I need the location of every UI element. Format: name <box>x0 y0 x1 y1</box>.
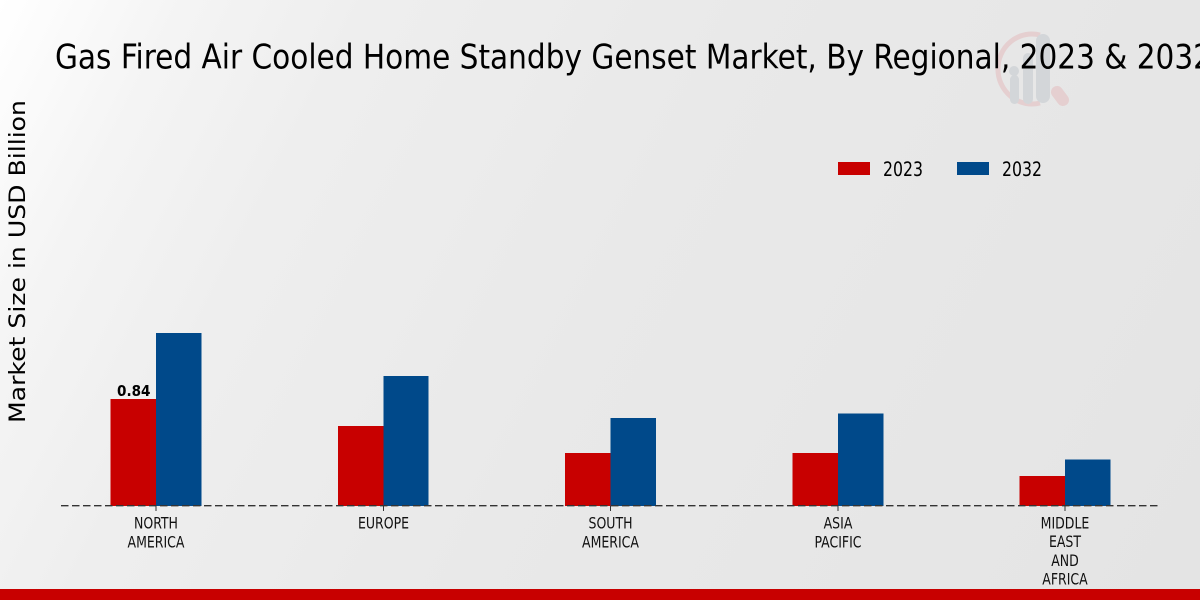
label: North America: AMERICA <box>128 532 185 552</box>
axis baseline <box>61 505 1160 507</box>
bars: North America <box>110 333 202 506</box>
data label: 0.84: 0.84 <box>117 382 151 400</box>
label: Asia Pacific: ASIA <box>824 513 853 533</box>
bars: South America <box>565 418 656 506</box>
bar chart <box>61 333 1160 511</box>
bars: Middle East and Africa <box>1020 460 1110 506</box>
label: Middle East and Africa: EAST <box>1049 532 1082 551</box>
label: Europe: EUROPE <box>358 513 409 533</box>
label: South America: SOUTH <box>588 513 633 533</box>
label: Middle East and Africa: AND <box>1051 551 1079 570</box>
label: Asia Pacific: PACIFIC <box>814 532 862 552</box>
label: Middle East and Africa: MIDDLE <box>1041 513 1089 533</box>
y axis label: Market Size in USD Billion <box>5 100 31 423</box>
legend item: 2023 <box>838 158 923 181</box>
label: Middle East and Africa: AFRICA <box>1042 570 1088 589</box>
legend item: 2032: 2032 <box>1002 158 1042 181</box>
bars: Asia Pacific <box>792 414 884 506</box>
legend item: 2023: 2023 <box>883 158 923 181</box>
footer bar <box>0 589 1200 600</box>
legend <box>838 158 1042 181</box>
legend item: 2032 <box>957 158 1042 181</box>
bars: Europe <box>338 376 428 506</box>
label: South America: AMERICA <box>582 532 640 552</box>
icon: watermark magnifier logo <box>998 34 1063 104</box>
x axis labels <box>128 513 1089 589</box>
label: North America: NORTH <box>134 513 178 533</box>
